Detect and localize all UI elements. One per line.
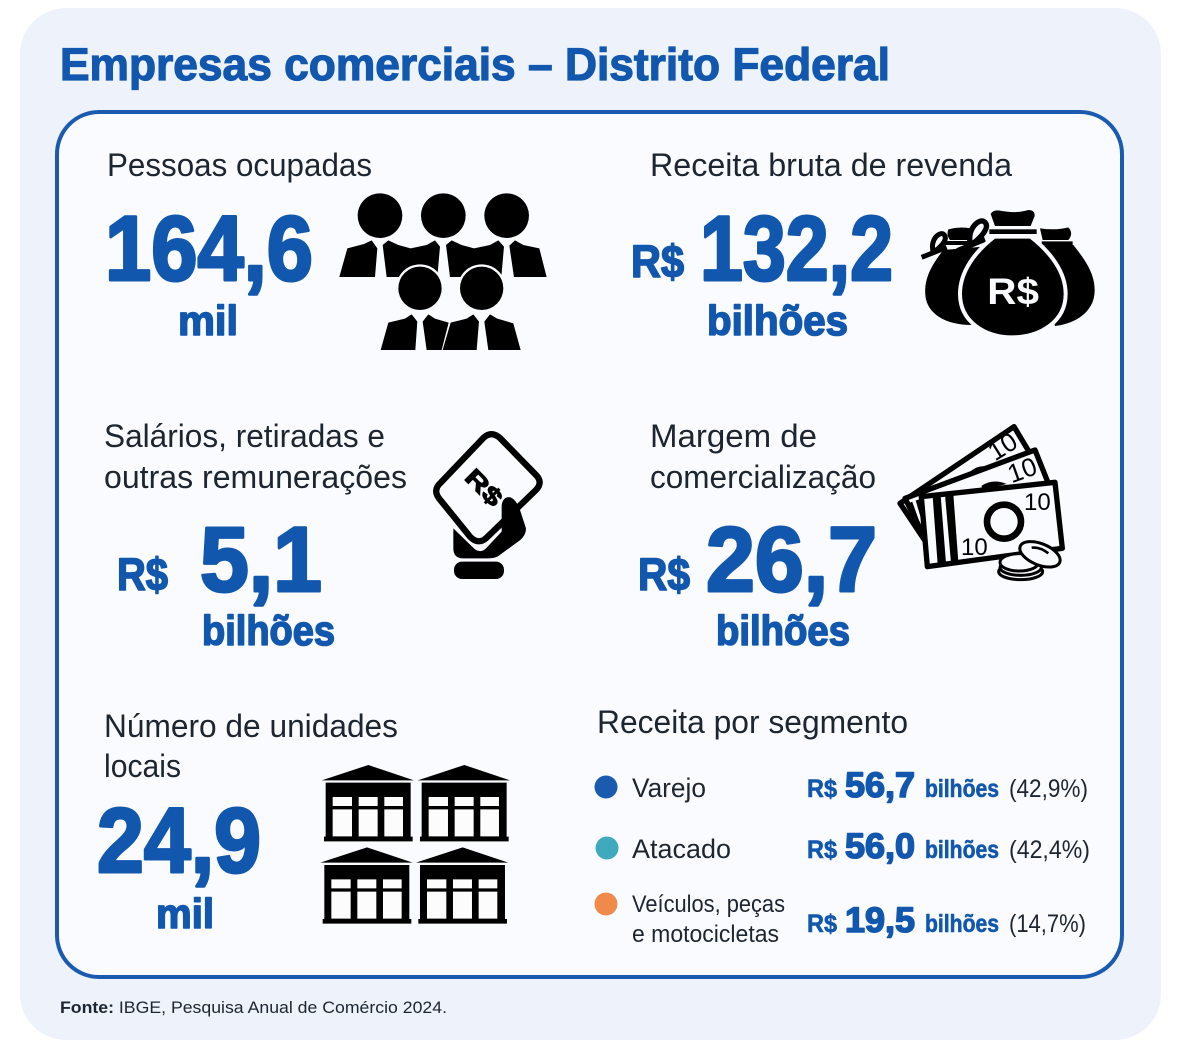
heading: número de unidades locais	[104, 708, 398, 784]
row: veículos, peças e motocicletas: Veículos, peças	[632, 891, 785, 918]
row: veículos, peças e motocicletas	[594, 891, 1086, 948]
value: R$ 5,1 bilhões	[117, 509, 335, 654]
heading: número de unidades locais: Número de unidades	[104, 708, 398, 744]
heading: salários, retiradas e outras remunerações: Salários, retiradas e	[104, 418, 385, 454]
row: veículos, peças e motocicletas: bilhões	[925, 910, 999, 938]
icon: buildings	[320, 765, 510, 924]
value: R$ 132,2 bilhões: R$	[631, 236, 684, 287]
heading: pessoas ocupadas: Pessoas ocupadas	[107, 147, 372, 183]
row: atacado	[596, 827, 1090, 866]
row: atacado: 56,0	[845, 827, 915, 866]
row: veículos, peças e motocicletas: R$	[807, 910, 837, 938]
heading: margem de comercialização: comercialização	[650, 459, 876, 495]
row: atacado: Atacado	[632, 834, 731, 864]
value: R$ 132,2 bilhões: bilhões	[707, 297, 848, 344]
main panel	[57, 112, 1122, 977]
panel: receita por segmento	[594, 704, 1090, 948]
icon: hand holding card	[436, 434, 540, 579]
row: atacado: bilhões	[925, 836, 999, 864]
icon: banknotes and coins: 10	[1024, 489, 1051, 516]
value: 24,9 mil: 24,9	[97, 790, 261, 892]
value: 24,9 mil	[97, 790, 261, 937]
icon: banknotes and coins: 10	[961, 534, 988, 561]
heading: número de unidades locais: locais	[104, 748, 181, 784]
row: varejo: bilhões	[925, 775, 999, 803]
value: 164,6 mil: 164,6	[105, 198, 313, 300]
value: 24,9 mil: mil	[156, 890, 214, 937]
heading: salários, retiradas e outras remunerações	[104, 418, 407, 495]
value: R$ 26,7 bilhões: R$	[638, 549, 690, 600]
icon: banknotes and coins	[900, 426, 1064, 580]
value: R$ 5,1 bilhões: 5,1	[200, 509, 322, 611]
panel: margem	[638, 418, 1064, 654]
panel: receita bruta	[631, 147, 1095, 344]
row: varejo	[594, 766, 1088, 805]
value: R$ 26,7 bilhões: bilhões	[716, 607, 850, 654]
row: veículos, peças e motocicletas: (14,7%)	[1009, 910, 1086, 938]
icon: hand holding card: R$	[459, 464, 508, 512]
icon: banknotes and coins: 10	[1003, 451, 1041, 489]
icon: money bags	[922, 210, 1095, 337]
panel: unidades locais	[97, 708, 510, 937]
value: 164,6 mil: mil	[178, 297, 238, 344]
row: varejo: R$	[807, 775, 837, 803]
value: R$ 132,2 bilhões: 132,2	[700, 198, 893, 300]
heading: receita bruta de revenda: Receita bruta de revenda	[650, 147, 1012, 183]
heading: margem de comercialização: Margem de	[650, 418, 817, 454]
row: varejo: Varejo	[632, 773, 706, 803]
row: varejo: (42,9%)	[1009, 775, 1088, 803]
value: R$ 26,7 bilhões	[638, 509, 877, 654]
value: R$ 5,1 bilhões: R$	[117, 549, 168, 600]
panel: salários	[104, 418, 540, 654]
row: veículos, peças e motocicletas: 19,5	[845, 901, 915, 940]
row: atacado: (42,4%)	[1009, 836, 1090, 864]
value: R$ 132,2 bilhões	[631, 198, 893, 344]
heading: margem de comercialização	[650, 418, 876, 495]
value: R$ 26,7 bilhões: 26,7	[706, 509, 877, 611]
value: R$ 5,1 bilhões: bilhões	[202, 607, 335, 654]
panel: pessoas ocupadas	[105, 147, 547, 350]
value: 164,6 mil	[105, 198, 313, 344]
row: atacado: R$	[807, 836, 837, 864]
title: Empresas comerciais – Distrito Federal	[60, 39, 890, 90]
heading: salários, retiradas e outras remunerações: outras remunerações	[104, 459, 407, 495]
row: varejo: 56,7	[845, 766, 915, 805]
icon: people	[339, 193, 547, 350]
row: veículos, peças e motocicletas: e motocicletas	[632, 921, 779, 948]
heading: receita por segmento: Receita por segmento	[597, 704, 908, 740]
icon: money bags: R$	[987, 270, 1039, 312]
icon: banknotes and coins: 10	[982, 426, 1023, 467]
source note: Fonte: IBGE, Pesquisa Anual de Comércio 2024.	[60, 999, 447, 1017]
